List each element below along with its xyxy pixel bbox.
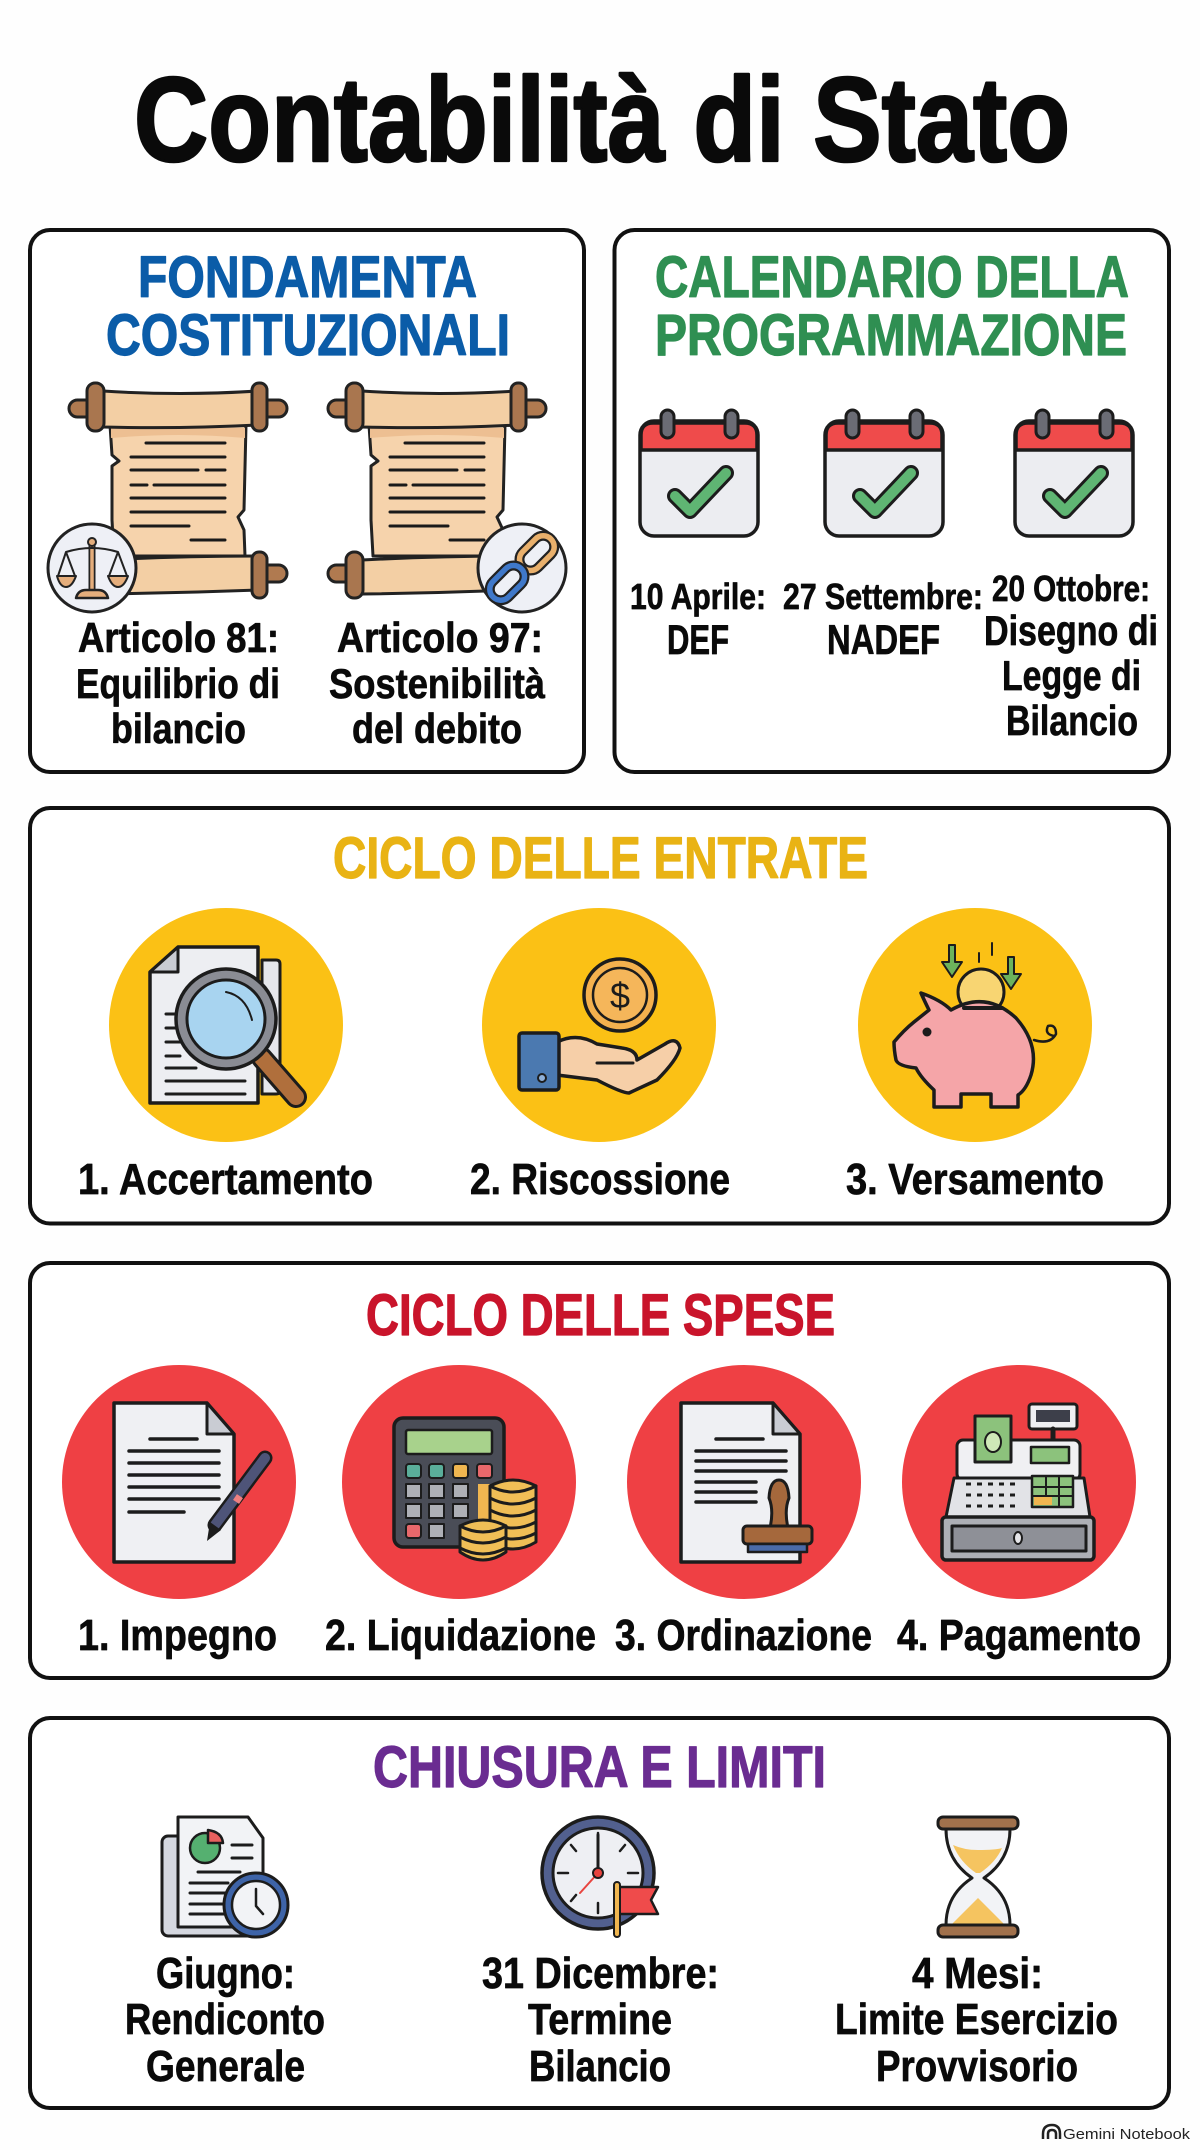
panel: calendario della programmazione bbox=[614, 230, 1169, 772]
watermark: gemini notebook: Gemini Notebook bbox=[1063, 2126, 1191, 2143]
text: 27 settembre: 27 Settembre: bbox=[783, 576, 983, 617]
text: articolo 97: Sostenibilità bbox=[329, 660, 546, 707]
icon: calendar 2 bbox=[825, 410, 943, 536]
labels: entrate steps bbox=[78, 1155, 1104, 1204]
text: 27 settembre bbox=[783, 576, 983, 663]
text: 20 ottobre: Bilancio bbox=[1006, 697, 1138, 744]
title: Contabilità di Stato bbox=[134, 53, 1070, 187]
labels: spese steps: 3. Ordinazione bbox=[615, 1611, 872, 1660]
icon: hand with coin: $ bbox=[610, 975, 630, 1016]
text: giugno: Generale bbox=[146, 2042, 305, 2091]
labels: entrate steps: 3. Versamento bbox=[846, 1155, 1104, 1204]
icon: cash register bbox=[902, 1365, 1136, 1599]
icon: piggy bank bbox=[858, 908, 1092, 1142]
panel: ciclo delle spese bbox=[30, 1263, 1169, 1678]
text: articolo 81: bilancio bbox=[111, 705, 246, 752]
text: 10 aprile bbox=[630, 576, 766, 663]
text: 10 aprile: 10 Aprile: bbox=[630, 576, 766, 617]
icon: report with clock bbox=[162, 1817, 288, 1937]
text: 20 ottobre: 20 Ottobre: bbox=[992, 568, 1150, 609]
text: 31 dicembre: Bilancio bbox=[529, 2042, 671, 2091]
text: 10 aprile: DEF bbox=[667, 616, 729, 663]
labels: entrate steps: 1. Accertamento bbox=[78, 1155, 373, 1204]
text: 20 ottobre: Legge di bbox=[1002, 652, 1141, 699]
text: articolo 97: del debito bbox=[352, 705, 522, 752]
icon: document with stamp bbox=[627, 1365, 861, 1599]
text: 31 dicembre: Termine bbox=[528, 1995, 672, 2044]
text: giugno bbox=[125, 1949, 325, 2091]
labels: spese steps bbox=[78, 1611, 1141, 1660]
panel: fondamenta costituzionali bbox=[30, 230, 584, 772]
icon: document with pen bbox=[62, 1365, 296, 1599]
icon: document with magnifier bbox=[109, 908, 343, 1142]
icon: hourglass bbox=[938, 1817, 1018, 1937]
heading: chiusura e limiti: CHIUSURA E LIMITI bbox=[373, 1735, 826, 1800]
text: articolo 81: Articolo 81: bbox=[78, 614, 279, 661]
text: articolo 81 bbox=[76, 614, 280, 752]
panel: chiusura e limiti bbox=[30, 1718, 1169, 2108]
heading: fondamenta costituzionali bbox=[106, 245, 510, 368]
text: giugno: Rendiconto bbox=[125, 1995, 325, 2044]
text: 20 ottobre: Disegno di bbox=[984, 607, 1158, 654]
icon: calendar 1 bbox=[640, 410, 758, 536]
labels: entrate steps: 2. Riscossione bbox=[470, 1155, 730, 1204]
heading: fondamenta costituzionali: COSTITUZIONALI bbox=[106, 303, 510, 368]
heading: ciclo delle spese: CICLO DELLE SPESE bbox=[366, 1283, 835, 1348]
icon: clock with flag bbox=[542, 1817, 658, 1937]
icon: hand with coin bbox=[482, 908, 716, 1142]
icon: scroll with scales bbox=[48, 383, 287, 612]
text: 4 mesi: 4 Mesi: bbox=[912, 1949, 1043, 1998]
icon: calendar 3 bbox=[1015, 410, 1133, 536]
heading: ciclo delle entrate: CICLO DELLE ENTRATE bbox=[333, 826, 868, 891]
heading: fondamenta costituzionali: FONDAMENTA bbox=[138, 245, 477, 310]
text: giugno: Giugno: bbox=[156, 1949, 295, 1998]
text: 4 mesi: Limite Esercizio bbox=[835, 1995, 1118, 2044]
text: 4 mesi bbox=[835, 1949, 1118, 2091]
text: articolo 97: Articolo 97: bbox=[337, 614, 543, 661]
text: 31 dicembre bbox=[482, 1949, 719, 2091]
icon: scroll with chain bbox=[328, 383, 566, 612]
heading: calendario della programmazione bbox=[655, 245, 1129, 368]
text: 31 dicembre: 31 Dicembre: bbox=[482, 1949, 719, 1998]
labels: spese steps: 4. Pagamento bbox=[897, 1611, 1141, 1660]
text: 27 settembre: NADEF bbox=[827, 616, 940, 663]
labels: spese steps: 2. Liquidazione bbox=[325, 1611, 596, 1660]
panel: ciclo delle entrate bbox=[30, 808, 1169, 1224]
icon: calculator with coins bbox=[342, 1365, 576, 1599]
text: 4 mesi: Provvisorio bbox=[876, 2042, 1078, 2091]
text: articolo 81: Equilibrio di bbox=[76, 660, 280, 707]
text: 20 ottobre bbox=[984, 568, 1158, 744]
labels: spese steps: 1. Impegno bbox=[78, 1611, 277, 1660]
text: articolo 97 bbox=[329, 614, 546, 752]
